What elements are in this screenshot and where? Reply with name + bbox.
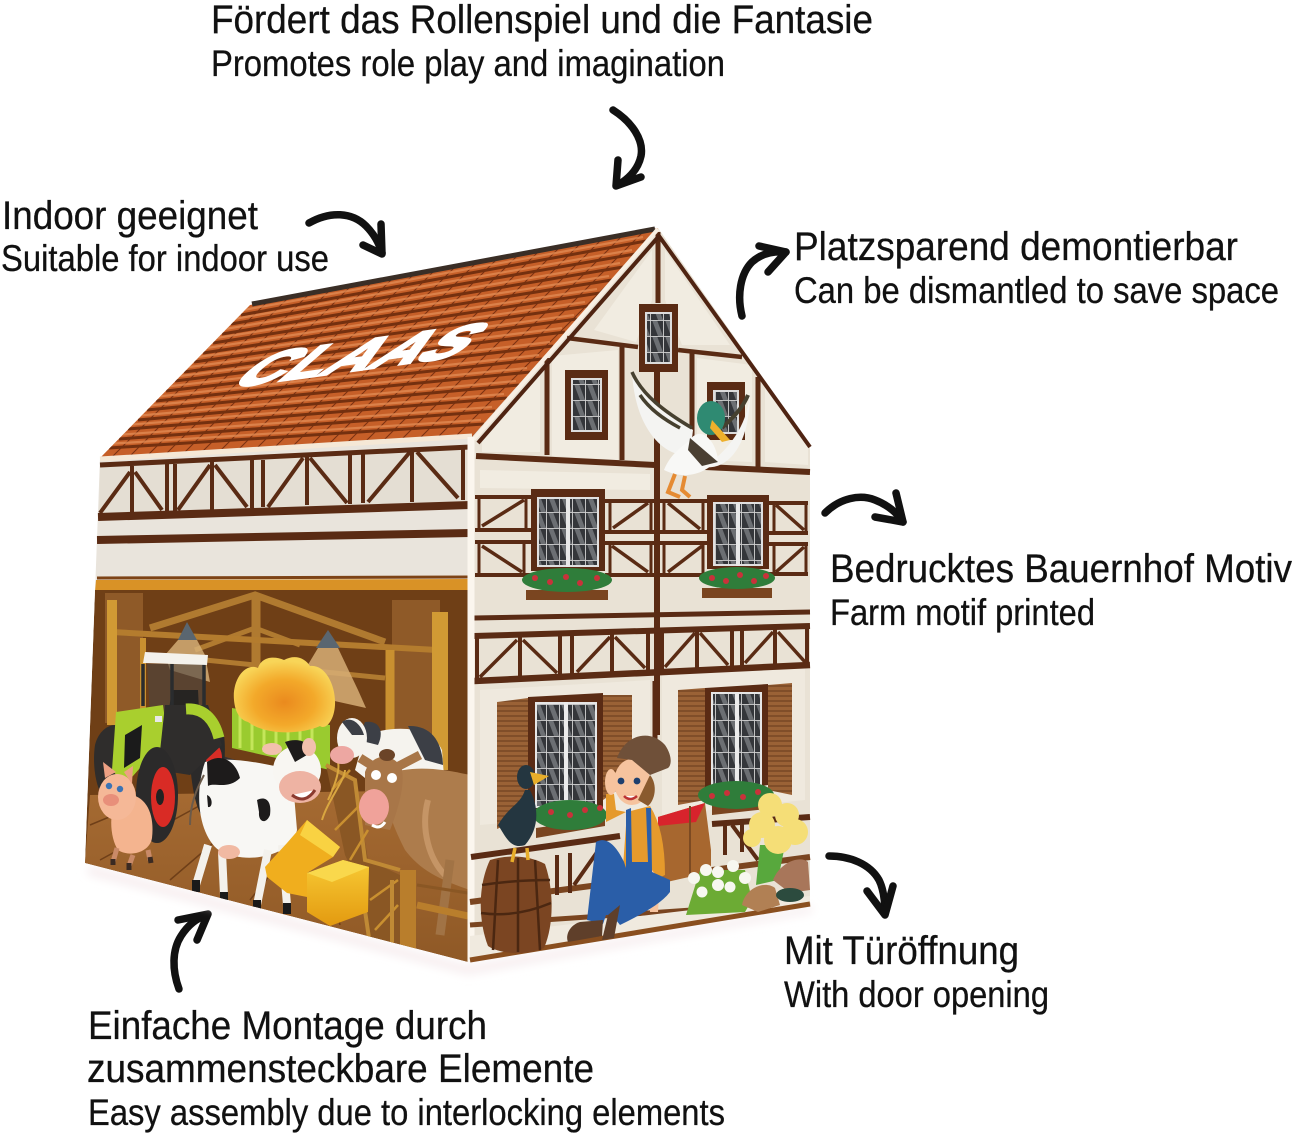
text: door opening: With door opening	[784, 974, 1049, 1015]
heading: role play: Promotes role play and imagination	[211, 43, 725, 84]
heading: role play	[211, 0, 873, 84]
text: easy assembly: Einfache Montage durch	[88, 1004, 487, 1048]
flower box right	[699, 567, 775, 598]
lower flower box right	[698, 781, 775, 815]
barn back wall panels	[105, 593, 440, 750]
panel: roof	[90, 220, 670, 465]
white cow	[190, 738, 321, 914]
brown cow	[359, 749, 470, 935]
gable plaster panels	[480, 250, 808, 825]
text: indoor use: Indoor geeignet	[2, 194, 258, 238]
right shutter pair	[678, 683, 792, 805]
pig	[98, 762, 153, 870]
roof logo: CLAAS	[215, 312, 507, 399]
flower box left	[522, 568, 612, 600]
middle right window	[707, 495, 769, 569]
text: dismantled	[794, 225, 1279, 311]
crate of apples	[658, 803, 711, 884]
lower right window	[705, 684, 768, 795]
farmer	[567, 736, 671, 942]
text: easy assembly: zusammensteckbare Elemente	[87, 1047, 594, 1091]
arrow: door opening	[829, 856, 893, 915]
tent illustration	[85, 220, 810, 962]
barn floor	[85, 790, 468, 962]
text: door opening	[784, 929, 1049, 1015]
arrow: indoor	[309, 215, 382, 254]
lower flower box left	[533, 800, 607, 838]
text: farm motif	[830, 547, 1292, 633]
attic window	[639, 304, 678, 372]
stable fence	[392, 870, 468, 952]
arrow: role play	[613, 110, 641, 186]
text: indoor use: Suitable for indoor use	[1, 238, 329, 279]
rocks	[742, 859, 810, 912]
arrow: farm motif	[825, 493, 903, 522]
lamp left	[165, 622, 210, 682]
barrel	[481, 857, 552, 953]
panel: left side wall	[95, 435, 472, 592]
left shutter pair	[497, 695, 632, 829]
white flowers	[686, 860, 752, 915]
text: farm motif: Farm motif printed	[830, 592, 1095, 633]
truss frieze	[98, 447, 470, 517]
black duck	[498, 765, 549, 862]
hay rack	[322, 762, 400, 950]
text: dismantled: Platzsparend demontierbar	[794, 225, 1238, 269]
yellow flowers	[743, 793, 808, 885]
black and white cow	[330, 718, 444, 778]
hay trailer	[215, 657, 335, 772]
panel: barn opening	[85, 590, 470, 962]
hay bales	[265, 820, 369, 926]
lamp right	[306, 630, 366, 708]
gable edges	[471, 229, 810, 962]
barn rafters	[112, 595, 440, 770]
flying duck	[632, 372, 750, 497]
upper right window	[707, 382, 745, 440]
middle left window	[531, 489, 605, 571]
text: indoor use	[1, 194, 329, 279]
arrow: dismantled	[740, 246, 786, 316]
half-timbered band	[474, 612, 810, 740]
text: easy assembly	[87, 1004, 725, 1133]
porch railing	[470, 817, 810, 962]
upper left window	[565, 370, 608, 440]
text: door opening: Mit Türöffnung	[784, 929, 1019, 973]
text: easy assembly: Easy assembly due to interlocking elements	[88, 1092, 725, 1133]
tractor	[94, 652, 225, 843]
arrow: easy assembly	[174, 914, 208, 989]
gable timber beams	[475, 232, 810, 735]
panel: gable front wall	[470, 228, 810, 962]
ground shadow	[88, 866, 812, 974]
lower left window	[528, 693, 603, 815]
